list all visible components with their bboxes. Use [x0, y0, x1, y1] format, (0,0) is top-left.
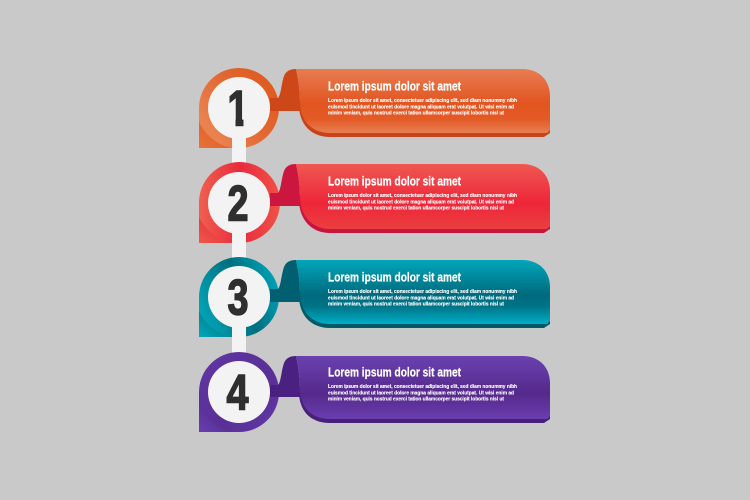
heading 2: Lorem ipsum dolor sit amet: [328, 174, 462, 188]
ring 4 corner shade: [199, 406, 233, 432]
heading 3: Lorem ipsum dolor sit amet: [328, 270, 462, 284]
body text 1: Lorem ipsum dolor sit amet, consectetuer adipiscing elit, sed diam nonummy nibh: [328, 98, 517, 104]
connector 2 to 3: [232, 227, 246, 267]
connector 3 to 4: [232, 322, 246, 362]
connector 1 to 2: [232, 132, 246, 172]
ribbon 3 underside: [299, 291, 550, 328]
body text 1: [328, 98, 517, 117]
body text 4: [328, 384, 517, 403]
ribbon 4 face: [296, 356, 550, 419]
panel: step 3 ribbon: [270, 260, 550, 328]
ribbon 2 face: [296, 164, 550, 229]
number 1 foot trim: [226, 119, 252, 128]
body text 2: minim veniam, quis nostrud exerci tation ullamcorper suscipit lobortis nisl ut: [328, 206, 504, 212]
heading 1: Lorem ipsum dolor sit amet: [328, 78, 462, 94]
ring 3 corner shade: [199, 311, 233, 337]
ribbon 2 fold: [270, 164, 300, 206]
ribbon 2 underside: [299, 195, 550, 233]
number circle 2: [208, 172, 270, 234]
number 3: 3: [228, 270, 248, 326]
ribbon 4 fold: [270, 356, 300, 397]
body text 4: euismod tincidunt ut laoreet dolore magna aliquam erat volutpat. Ut wisi enim ad: [328, 390, 514, 396]
panel: step 1 ribbon: [270, 69, 550, 137]
number circle 4: [208, 361, 270, 423]
body text 3: [328, 289, 517, 308]
body text 4: minim veniam, quis nostrud exerci tation ullamcorper suscipit lobortis nisl ut: [328, 397, 504, 403]
body text 2: euismod tincidunt ut laoreet dolore magna aliquam erat volutpat. Ut wisi enim ad: [328, 199, 514, 205]
step 3 marker: [199, 257, 279, 337]
ring 1 corner shade: [199, 122, 233, 148]
body text 1: minim veniam, quis nostrud exerci tation ullamcorper suscipit lobortis nisl ut: [328, 111, 504, 117]
body text 3: Lorem ipsum dolor sit amet, consectetuer adipiscing elit, sed diam nonummy nibh: [328, 289, 517, 295]
panel: step 2 ribbon: [270, 164, 550, 233]
number 1: 1: [228, 80, 248, 136]
ribbon 1 fold: [270, 69, 300, 111]
number 4: 4: [226, 364, 249, 420]
ring 2 corner shade: [199, 217, 233, 243]
body text 2: Lorem ipsum dolor sit amet, consectetuer adipiscing elit, sed diam nonummy nibh: [328, 193, 517, 199]
body text 1: euismod tincidunt ut laoreet dolore magna aliquam erat volutpat. Ut wisi enim ad: [328, 104, 514, 110]
number circle 3: [208, 266, 270, 328]
step 2 marker: [199, 162, 280, 243]
ring 4: [199, 352, 279, 432]
ring 3: [199, 257, 279, 337]
ribbon 3 fold: [270, 260, 300, 302]
body text 2: [328, 193, 517, 212]
step 4 marker: [199, 352, 279, 432]
ring 2: [199, 162, 280, 243]
number 2: 2: [228, 176, 248, 232]
ribbon 1 underside: [299, 100, 550, 137]
ring 1: [199, 68, 279, 148]
number circle 1: [208, 77, 270, 139]
ribbon 1 face: [296, 69, 550, 133]
body text 3: minim veniam, quis nostrud exerci tation ullamcorper suscipit lobortis nisl ut: [328, 302, 504, 308]
body text 3: euismod tincidunt ut laoreet dolore magna aliquam erat volutpat. Ut wisi enim ad: [328, 295, 514, 301]
ribbon 4 underside: [299, 387, 550, 423]
panel: step 4 ribbon: [270, 356, 550, 423]
step 1 marker: [199, 68, 279, 148]
heading 4: Lorem ipsum dolor sit amet: [328, 364, 462, 380]
body text 4: Lorem ipsum dolor sit amet, consectetuer adipiscing elit, sed diam nonummy nibh: [328, 384, 517, 390]
ribbon 3 face: [296, 260, 550, 324]
